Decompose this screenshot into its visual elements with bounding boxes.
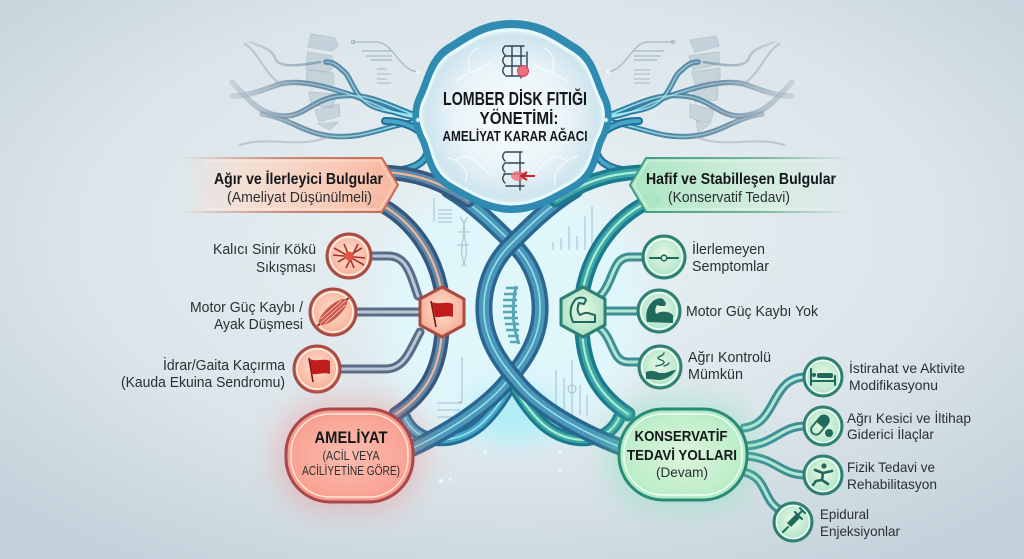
left heading banner: [180, 158, 398, 212]
treatment labels: Epidural: [820, 506, 869, 522]
left finding labels: Kalıcı Sinir Kökü: [213, 241, 316, 258]
treatment labels: Fizik Tedavi ve: [847, 459, 935, 475]
bottom crossing glow: [469, 389, 561, 441]
sparkle dots: [416, 70, 610, 483]
circle: nerve compression: [327, 234, 371, 278]
right hub: arm icon: [561, 287, 605, 337]
right connector tubes: [600, 257, 644, 362]
central crossing ribbons: [404, 190, 628, 452]
left finding labels: Motor Güç Kaybı /: [190, 299, 304, 316]
treatment labels: Enjeksiyonlar: [820, 523, 900, 539]
right heading banner: [630, 158, 850, 212]
left finding labels: Sıkışması: [256, 259, 316, 276]
circle: red flag: [294, 346, 340, 392]
left data lines: [351, 40, 418, 83]
right nerve branches: [600, 42, 792, 145]
treatment labels: İstirahat ve Aktivite: [849, 359, 965, 376]
left finding labels: [121, 241, 316, 391]
veins inside title node: [442, 48, 582, 185]
surgery outcome pill: (ACİL VEYA: [322, 449, 380, 463]
right data lines: [608, 40, 675, 83]
left nerve branches: [232, 42, 424, 145]
left heading banner: Ağır ve İlerleyici Bulgular: [214, 170, 383, 188]
left spine illustration: [306, 34, 340, 130]
right heading banner: Hafif ve Stabilleşen Bulgular: [646, 171, 836, 188]
conservative outcome pill: [619, 409, 747, 500]
conservative outcome pill: KONSERVATİF: [634, 428, 728, 445]
surgery outcome pill: [286, 409, 413, 502]
central light glow: [377, 175, 647, 445]
circle: muscle: [310, 289, 356, 335]
left hub: red flag: [420, 287, 464, 337]
treatment labels: Rehabilitasyon: [847, 476, 937, 492]
circle: rest: [804, 358, 842, 396]
left finding labels: İdrar/Gaita Kaçırma: [163, 356, 286, 374]
central title node: [417, 24, 607, 209]
right finding labels: [686, 240, 818, 383]
circle: pain control: [639, 346, 681, 388]
title text: LOMBER DİSK FITIĞI: [443, 88, 587, 109]
circle: strong arm: [638, 290, 680, 332]
left heading banner: (Ameliyat Düşünülmeli): [227, 189, 372, 206]
left finding labels: (Kauda Ekuina Sendromu): [121, 374, 285, 391]
circle: non-progressive: [643, 236, 685, 278]
conservative outcome glow: [608, 400, 756, 510]
left stem ribbons: [372, 121, 468, 414]
lower loop ribbons: [404, 378, 620, 440]
surgery outcome pill: ACİLİYETİNE GÖRE): [302, 464, 400, 478]
conservative outcome pill: (Devam): [656, 464, 708, 480]
treatment labels: Ağrı Kesici ve İltihap: [847, 409, 971, 426]
treatment labels: [820, 359, 971, 539]
left finding labels: Ayak Düşmesi: [214, 316, 303, 333]
icon: spine with nerve compression bottom: [503, 152, 535, 190]
title text: YÖNETİMİ:: [480, 108, 558, 128]
decorative dna and charts: [434, 198, 592, 420]
treatment branch tubes: [744, 377, 806, 510]
right finding labels: Ağrı Kontrolü: [688, 349, 771, 366]
circle: physical therapy: [804, 456, 842, 494]
surgery outcome glow: [276, 400, 422, 512]
right stem ribbons: [556, 121, 652, 414]
circle: medication: [804, 407, 842, 445]
right finding labels: Mümkün: [688, 366, 743, 383]
right finding labels: İlerlemeyen: [692, 240, 765, 258]
right finding labels: Semptomlar: [692, 258, 769, 275]
right finding labels: Motor Güç Kaybı Yok: [686, 303, 818, 320]
icon: spine with herniation top: [503, 46, 528, 78]
circle: injection: [774, 503, 812, 541]
right heading banner: (Konservatif Tedavi): [668, 189, 790, 206]
title text: [442, 88, 588, 145]
surgery outcome pill: AMELİYAT: [314, 429, 388, 447]
right spine illustration: [689, 36, 720, 132]
conservative outcome pill: TEDAVİ YOLLARI: [627, 447, 737, 464]
treatment labels: Modifikasyonu: [849, 377, 938, 393]
treatment labels: Giderici İlaçlar: [847, 425, 934, 442]
title text: AMELİYAT KARAR AĞACI: [442, 127, 588, 145]
central spine motif: [503, 286, 519, 344]
left connector tubes: [340, 256, 420, 369]
